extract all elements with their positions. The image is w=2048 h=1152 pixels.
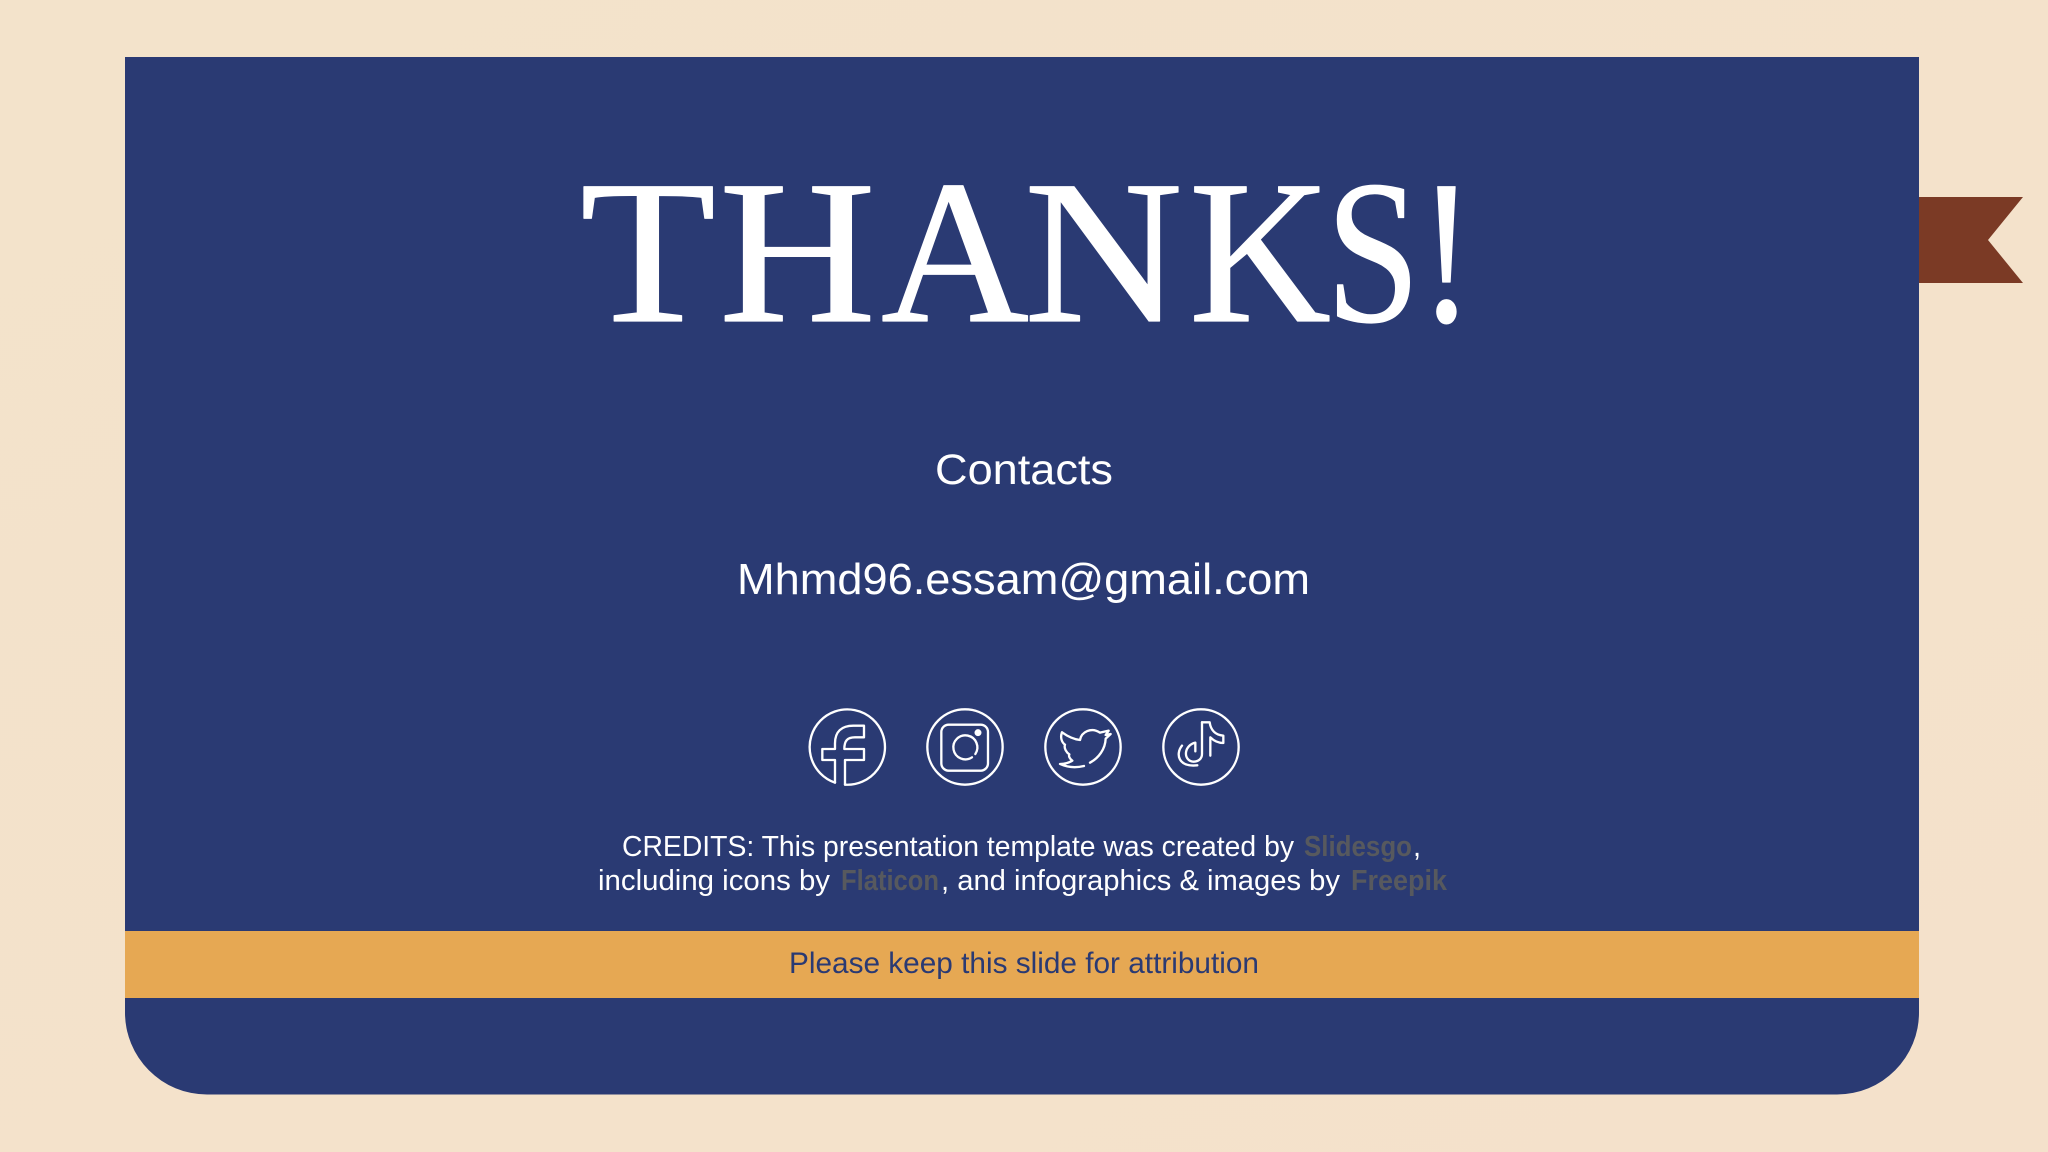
credits line two: including icons by bbox=[598, 865, 830, 897]
title: A bbox=[881, 139, 1029, 366]
credits line one: Slidesgo bbox=[1304, 831, 1412, 863]
icon: twitter bbox=[1045, 709, 1121, 785]
title: ! bbox=[1419, 139, 1474, 366]
attribution band bbox=[125, 931, 1919, 998]
title: H bbox=[719, 139, 876, 366]
icon: facebook bbox=[810, 709, 885, 785]
icon: instagram bbox=[927, 709, 1003, 785]
attribution text: Please keep this slide for attribution bbox=[789, 947, 1259, 980]
social icons bbox=[810, 709, 1239, 785]
title: K bbox=[1189, 139, 1331, 366]
credits line two: Flaticon bbox=[841, 865, 939, 897]
icon: tiktok bbox=[1163, 709, 1239, 785]
credits text bbox=[598, 831, 1448, 897]
ribbon bookmark bbox=[1919, 197, 2023, 283]
credits line two: Freepik bbox=[1351, 865, 1448, 897]
credits line one: , bbox=[1413, 831, 1421, 863]
contact email: Mhmd96.essam@gmail.com bbox=[737, 555, 1310, 604]
title: S bbox=[1326, 139, 1420, 366]
title: N bbox=[1024, 139, 1183, 366]
contacts heading: Contacts bbox=[935, 446, 1113, 494]
credits line two: , and infographics & images by bbox=[941, 865, 1340, 897]
credits line one: CREDITS: This presentation template was created by bbox=[622, 831, 1294, 863]
panel: navy card bbox=[125, 57, 1919, 1094]
title: T bbox=[580, 139, 716, 366]
